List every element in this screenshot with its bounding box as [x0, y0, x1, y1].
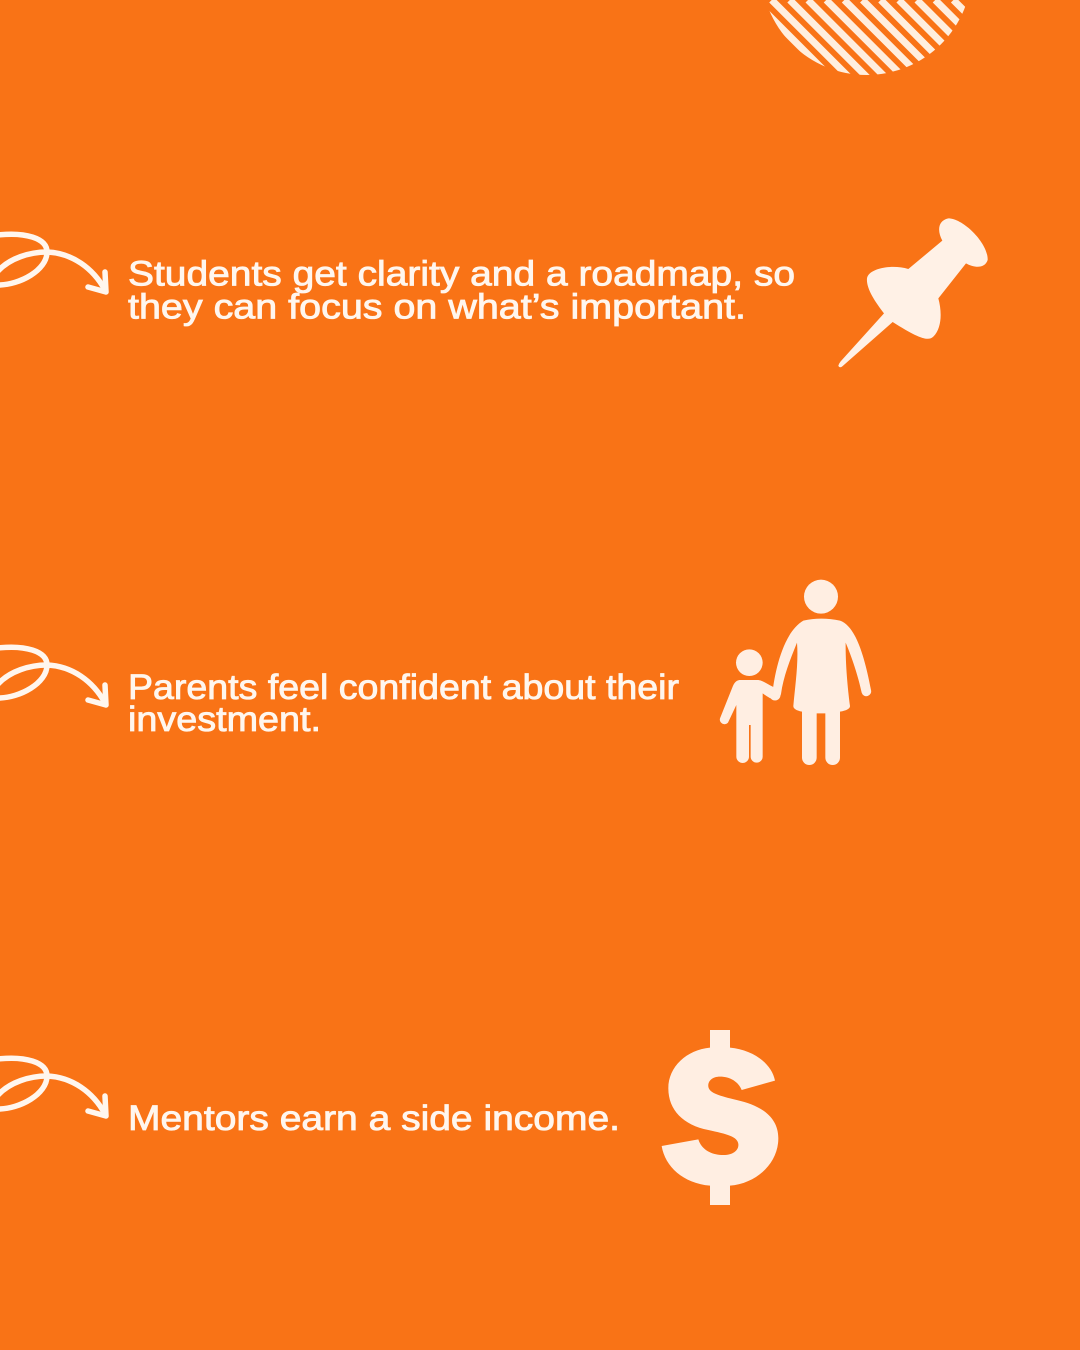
icon: push pin: [838, 218, 988, 367]
arrow: students: [0, 234, 106, 292]
text: students: [128, 254, 795, 326]
text: students: they can focus on what’s important.: [128, 288, 746, 326]
icon: parent and child: [720, 580, 871, 765]
striped semicircle decoration: [769, 0, 966, 75]
text: parents: [128, 668, 679, 739]
arrow: parents: [0, 647, 106, 705]
text: parents: investment.: [128, 700, 321, 739]
icon: dollar sign: [662, 1030, 778, 1205]
text: students: Students get clarity and a roadmap, so: [128, 254, 795, 294]
text: parents: Parents feel confident about their: [128, 668, 679, 707]
arrow: mentors: [0, 1058, 106, 1116]
text: mentors: Mentors earn a side income.: [128, 1099, 620, 1138]
